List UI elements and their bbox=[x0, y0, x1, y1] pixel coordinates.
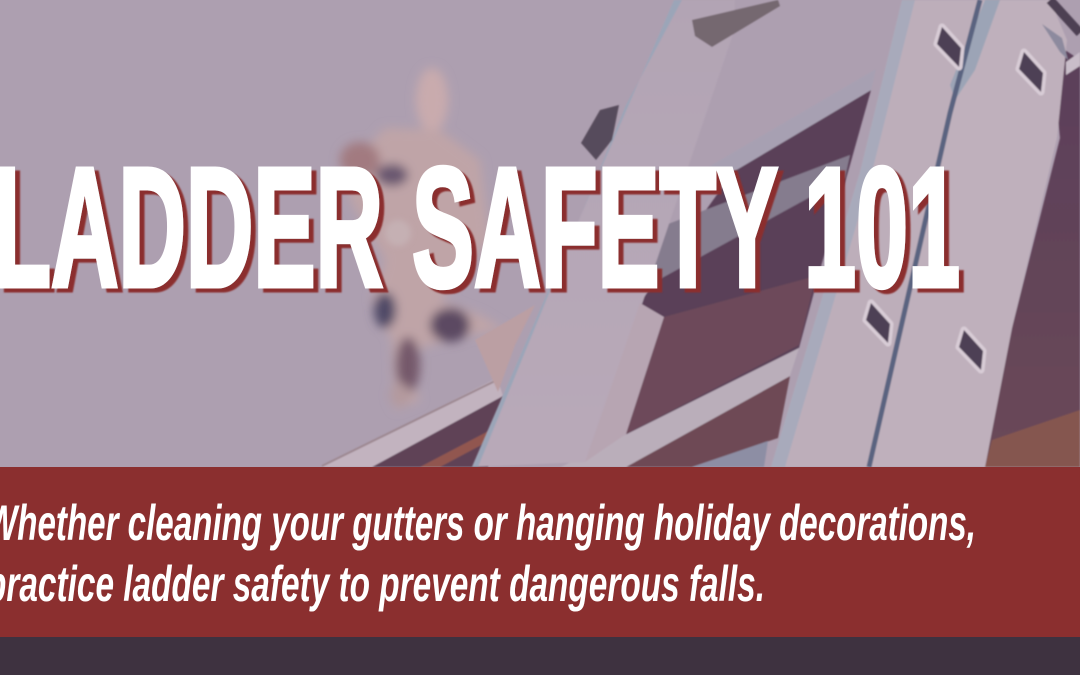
rail seam bbox=[869, 0, 980, 467]
blurred worker figure bbox=[340, 68, 505, 410]
right rail bbox=[868, 0, 1067, 467]
title: SAFETY bbox=[412, 133, 778, 323]
rail highlight patch bbox=[950, 0, 1000, 100]
title: 101 bbox=[804, 133, 960, 323]
rung two bbox=[655, 154, 850, 278]
wood behind upper rungs bbox=[626, 90, 871, 440]
top right bracket bbox=[1050, 0, 1080, 33]
ladder illustration bbox=[472, 0, 1080, 467]
left rail bbox=[478, 202, 670, 467]
ladder hole bbox=[866, 303, 890, 343]
subtitle band bbox=[0, 467, 1080, 637]
rung one bbox=[736, 90, 871, 170]
rail bracket bbox=[581, 105, 619, 160]
rung three bbox=[561, 348, 799, 467]
grainy inner rail piece bbox=[585, 303, 664, 462]
rung four bbox=[692, 441, 768, 467]
upper rung block bbox=[692, 0, 780, 47]
middle rail bbox=[771, 0, 981, 467]
ladder hole bbox=[1019, 52, 1043, 92]
right dark wall bbox=[985, 40, 1080, 467]
ladder hole bbox=[959, 330, 983, 370]
ladder hole bbox=[937, 27, 961, 67]
roof edge bbox=[322, 305, 535, 467]
subtitle text bbox=[0, 495, 976, 612]
hero photo background bbox=[0, 0, 1080, 467]
title: LADDER bbox=[0, 133, 383, 323]
footer bar bbox=[0, 637, 1080, 675]
